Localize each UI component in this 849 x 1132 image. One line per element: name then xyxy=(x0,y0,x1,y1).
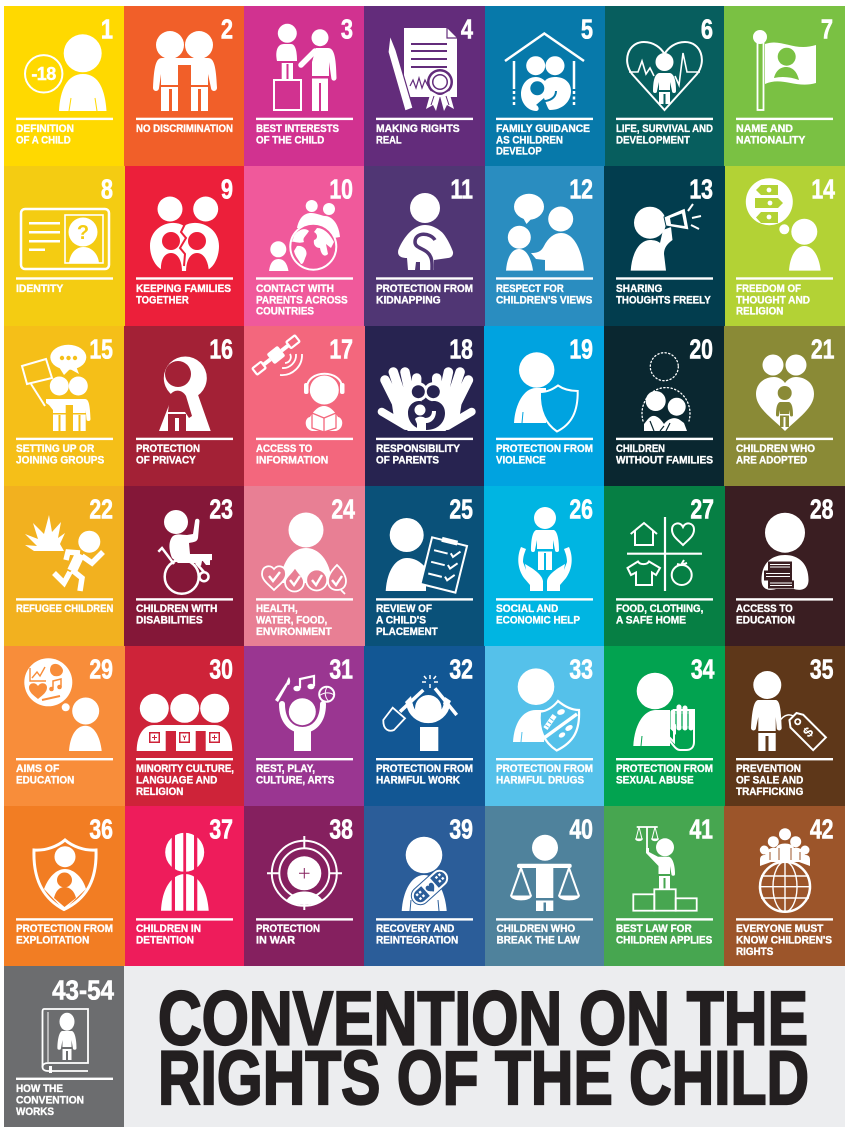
label: BEST INTERESTS xyxy=(256,123,339,135)
icon: child as scales of justice xyxy=(510,835,580,911)
panel: articles 43-54 xyxy=(4,966,124,1127)
icon: document, pen and seal xyxy=(388,28,457,111)
label xyxy=(16,277,113,295)
panel: article 1 xyxy=(4,6,124,166)
label: SEXUAL ABUSE xyxy=(616,774,694,786)
icon: identity card xyxy=(21,209,109,269)
label: REFUGEE CHILDREN xyxy=(16,603,113,615)
label: PROTECTION FROM xyxy=(496,443,593,455)
panel: article 27 xyxy=(604,486,725,646)
label: PROTECTION FROM xyxy=(616,763,713,775)
number 41: 41 xyxy=(689,814,713,845)
number 6: 6 xyxy=(701,14,713,45)
label: KNOW CHILDREN'S xyxy=(736,934,832,946)
panel: article 13 xyxy=(604,166,725,326)
label xyxy=(496,758,593,786)
panel: article 31 xyxy=(244,646,364,806)
label: OF PARENTS xyxy=(376,454,439,466)
label: DEFINITION xyxy=(16,123,74,135)
panel: article 32 xyxy=(364,646,485,806)
label: ECONOMIC HELP xyxy=(496,614,580,626)
label: PROTECTION FROM xyxy=(376,283,473,295)
label xyxy=(16,438,113,466)
number 43-54: 43-54 xyxy=(52,974,114,1006)
number 32: 32 xyxy=(449,654,473,685)
label: VIOLENCE xyxy=(496,454,546,466)
label: WITHOUT FAMILIES xyxy=(616,454,713,466)
number 39: 39 xyxy=(449,814,473,845)
label xyxy=(736,918,833,958)
icon: home, love, clothing, food xyxy=(627,517,702,591)
panel: title background xyxy=(124,966,845,1127)
icon: child on podium holding scales xyxy=(633,827,697,911)
label: CONTACT WITH xyxy=(256,283,334,295)
label xyxy=(376,118,473,146)
label: MAKING RIGHTS xyxy=(376,123,460,135)
label: RESPECT FOR xyxy=(496,283,564,295)
label: EDUCATION xyxy=(16,774,74,786)
label: KEEPING FAMILIES xyxy=(136,283,231,295)
label: LIFE, SURVIVAL AND xyxy=(616,123,713,135)
label: AS CHILDREN xyxy=(496,134,563,146)
panel: article 8 xyxy=(4,166,125,326)
number 15: 15 xyxy=(89,334,113,365)
label xyxy=(376,438,473,466)
icon: child with price tag xyxy=(751,671,826,751)
label: HOW THE xyxy=(16,1083,63,1095)
label xyxy=(616,277,713,306)
panel: article 36 xyxy=(4,806,125,966)
number 13: 13 xyxy=(689,174,713,205)
label xyxy=(136,918,233,946)
label xyxy=(376,598,473,638)
label xyxy=(496,118,593,158)
label: BREAK THE LAW xyxy=(496,934,580,946)
number 5: 5 xyxy=(581,14,593,45)
label: DETENTION xyxy=(136,934,194,946)
panel: article 2 xyxy=(124,6,244,166)
label xyxy=(136,118,233,135)
label xyxy=(256,758,353,786)
label xyxy=(616,918,713,946)
panel: article 42 xyxy=(724,806,845,966)
label: BEST LAW FOR xyxy=(616,923,692,935)
icon: hands holding family xyxy=(382,372,472,431)
label: HARMFUL DRUGS xyxy=(496,774,584,786)
panel: article 33 xyxy=(485,646,605,806)
label: RELIGION xyxy=(736,306,783,318)
label xyxy=(736,277,833,318)
panel: article 5 xyxy=(485,6,605,166)
number 18: 18 xyxy=(449,334,473,365)
number 36: 36 xyxy=(89,814,113,845)
number 8: 8 xyxy=(101,174,113,205)
label: CULTURE, ARTS xyxy=(256,774,334,786)
label: DISABILITIES xyxy=(136,614,203,626)
label xyxy=(376,277,473,306)
icon: children without parents xyxy=(642,353,690,431)
icon: child behind bars xyxy=(161,830,209,912)
label: LANGUAGE AND xyxy=(136,774,217,786)
label: REVIEW OF xyxy=(376,603,432,615)
panel: article 37 xyxy=(125,806,244,966)
label: KIDNAPPING xyxy=(376,294,441,306)
label: OF PRIVACY xyxy=(136,454,196,466)
number 34: 34 xyxy=(691,654,715,685)
panel: article 29 xyxy=(4,646,125,806)
label xyxy=(376,758,473,786)
label: CHILDREN WITH xyxy=(136,603,217,615)
label: NATIONALITY xyxy=(736,134,806,146)
panel: article 18 xyxy=(365,326,485,486)
label: TOGETHER xyxy=(136,294,189,306)
icon: child under 18: -18 xyxy=(31,64,56,84)
label: CHILDREN'S VIEWS xyxy=(496,294,592,306)
icon: children with sign and speech bubble xyxy=(22,345,90,431)
panel: article 20 xyxy=(604,326,724,486)
panel: article 26 xyxy=(484,486,604,646)
number 30: 30 xyxy=(209,654,233,685)
panel: article 6 xyxy=(605,6,724,166)
number 33: 33 xyxy=(569,654,593,685)
number 7: 7 xyxy=(821,14,833,45)
icon: child held by hands xyxy=(518,507,572,591)
panel: article 21 xyxy=(724,326,845,486)
label: CHILDREN WHO xyxy=(496,923,576,935)
label xyxy=(616,598,713,626)
number 16: 16 xyxy=(209,334,233,365)
number 24: 24 xyxy=(331,494,355,525)
label xyxy=(16,918,113,946)
icon: child with books xyxy=(761,513,809,590)
panel: article 30 xyxy=(125,646,244,806)
panel: article 25 xyxy=(365,486,485,646)
label: PROTECTION FROM xyxy=(496,763,593,775)
number 12: 12 xyxy=(569,174,593,205)
icon: book with child xyxy=(42,1009,88,1073)
label: HEALTH, xyxy=(256,603,298,615)
label: REAL xyxy=(376,134,402,146)
label xyxy=(496,277,593,306)
number 23: 23 xyxy=(209,494,233,525)
number 37: 37 xyxy=(209,814,233,845)
label: ENVIRONMENT xyxy=(256,626,332,638)
panel: article 11 xyxy=(364,166,485,326)
label: PLACEMENT xyxy=(376,626,438,638)
number 11: 11 xyxy=(451,174,473,205)
label: PROTECTION FROM xyxy=(376,763,473,775)
label: RIGHTS xyxy=(736,946,773,958)
label xyxy=(736,598,833,626)
icon: family in house xyxy=(505,34,584,111)
panel: article 3 xyxy=(244,6,364,166)
panel: article 38 xyxy=(244,806,364,966)
number 17: 17 xyxy=(329,334,353,365)
label xyxy=(136,277,233,306)
label: AIMS OF xyxy=(16,763,60,775)
label: ACCESS TO xyxy=(736,603,793,615)
label: PROTECTION FROM xyxy=(16,923,113,935)
panel: article 15 xyxy=(4,326,124,486)
label xyxy=(736,118,833,146)
icon: thought of education xyxy=(24,658,102,751)
label: HARMFUL WORK xyxy=(376,774,460,786)
icon: identity card: ? xyxy=(77,222,89,244)
label: WORKS xyxy=(16,1106,54,1118)
label: ARE ADOPTED xyxy=(736,454,807,466)
number 9: 9 xyxy=(221,174,233,205)
label: RESPONSIBILITY xyxy=(376,443,461,455)
panel: article 19 xyxy=(484,326,604,486)
label: WATER, FOOD, xyxy=(256,614,327,626)
panel: article 14 xyxy=(725,166,845,326)
label: IDENTITY xyxy=(16,283,64,295)
number 35: 35 xyxy=(810,654,834,685)
panel: article 24 xyxy=(244,486,365,646)
label xyxy=(16,1078,113,1118)
icon: parents across the globe xyxy=(269,200,340,271)
label: EDUCATION xyxy=(736,614,795,626)
label: ACCESS TO xyxy=(256,443,313,455)
label: DEVELOPMENT xyxy=(616,134,690,146)
number 27: 27 xyxy=(690,494,714,525)
label: FAMILY GUIDANCE xyxy=(496,123,590,135)
icon: child under 18 xyxy=(25,34,106,111)
label: THOUGHT AND xyxy=(736,294,810,306)
label: NAME AND xyxy=(736,123,793,135)
number 26: 26 xyxy=(569,494,593,525)
label xyxy=(16,598,113,615)
number 25: 25 xyxy=(449,494,473,525)
number 28: 28 xyxy=(810,494,834,525)
label: OF A CHILD xyxy=(16,134,71,146)
label: A SAFE HOME xyxy=(616,614,686,626)
icon: thought of signpost xyxy=(746,178,821,271)
label xyxy=(256,118,353,146)
label: PREVENTION xyxy=(736,763,801,775)
label: OF SALE AND xyxy=(736,774,803,786)
label: INFORMATION xyxy=(256,454,328,466)
number 21: 21 xyxy=(811,334,835,365)
icon: heart with heartbeat and child xyxy=(627,42,702,110)
panel: article 17 xyxy=(244,326,365,486)
label: NO DISCRIMINATION xyxy=(136,123,233,135)
label: DEVELOP xyxy=(496,146,542,158)
panel: article 22 xyxy=(4,486,124,646)
label xyxy=(616,118,713,146)
label: CONVENTION xyxy=(16,1095,84,1107)
panel: article 10 xyxy=(244,166,364,326)
panel: article 40 xyxy=(485,806,605,966)
icon: broken family xyxy=(150,196,219,272)
label xyxy=(136,758,234,798)
label xyxy=(16,118,113,146)
panel: article 23 xyxy=(124,486,244,646)
label xyxy=(496,598,593,626)
label xyxy=(136,438,233,466)
label: CHILDREN WHO xyxy=(736,443,815,455)
number 29: 29 xyxy=(89,654,113,685)
panel: article 7 xyxy=(724,6,845,166)
label: PROTECTION xyxy=(136,443,200,455)
label: A CHILD'S xyxy=(376,614,426,626)
panel: article 12 xyxy=(485,166,604,326)
title xyxy=(158,976,809,1121)
label xyxy=(256,277,353,318)
label xyxy=(16,758,113,786)
label xyxy=(256,918,353,946)
number 31: 31 xyxy=(329,654,353,685)
number 3: 3 xyxy=(341,14,353,45)
label: EXPLOITATION xyxy=(16,934,89,946)
icon: child with review checklist xyxy=(386,518,468,593)
icon: child playing, arts and music xyxy=(275,676,334,751)
icon: two children together xyxy=(153,31,217,111)
icon: satellite and reading child xyxy=(251,333,344,432)
icon: shield protecting child xyxy=(34,840,96,910)
label: IN WAR xyxy=(256,934,295,946)
label xyxy=(736,438,833,466)
label: FREEDOM OF xyxy=(736,283,801,295)
label xyxy=(616,758,713,786)
panel: article 39 xyxy=(364,806,485,966)
label: MINORITY CULTURE, xyxy=(136,763,234,775)
icon: child in target xyxy=(267,836,342,910)
icon: child in keyhole xyxy=(159,356,211,431)
icon: flag with person xyxy=(753,30,816,110)
label: CHILDREN APPLIES xyxy=(616,934,712,946)
icon: child with shield xyxy=(514,352,578,432)
label: REST, PLAY, xyxy=(256,763,315,775)
label xyxy=(736,758,833,798)
number 4: 4 xyxy=(461,14,473,45)
label: FOOD, CLOTHING, xyxy=(616,603,703,615)
icon: child with shield against drugs xyxy=(513,668,579,750)
label: EVERYONE MUST xyxy=(736,923,824,935)
number 40: 40 xyxy=(569,814,593,845)
panel: article 34 xyxy=(604,646,725,806)
icon: child in wheelchair xyxy=(158,510,212,594)
panel: article 16 xyxy=(124,326,244,486)
label: CHILDREN IN xyxy=(136,923,201,935)
label: PARENTS ACROSS xyxy=(256,294,348,306)
label xyxy=(616,438,713,466)
label: TRAFFICKING xyxy=(736,786,803,798)
panel: article 4 xyxy=(364,6,485,166)
number 42: 42 xyxy=(810,814,834,845)
label: CHILDREN xyxy=(616,443,665,455)
number 20: 20 xyxy=(689,334,713,365)
icon: protected child xyxy=(398,193,453,271)
label xyxy=(256,438,353,466)
number 22: 22 xyxy=(89,494,113,525)
label: SHARING xyxy=(616,283,662,295)
label: RECOVERY AND xyxy=(376,923,454,935)
icon: child with shovel, harmful work xyxy=(383,675,457,751)
panel: article 41 xyxy=(604,806,724,966)
label xyxy=(256,598,353,638)
number 2: 2 xyxy=(221,14,233,45)
icon: adult with child on box xyxy=(274,24,336,111)
icon: child speaking to adult xyxy=(506,194,584,271)
number 19: 19 xyxy=(569,334,593,365)
icon: running refugee and explosion xyxy=(25,515,103,591)
icon: child with price tag: $ xyxy=(800,723,817,740)
label: COUNTRIES xyxy=(256,306,314,318)
label: RELIGION xyxy=(136,786,183,798)
number 38: 38 xyxy=(329,814,353,845)
label: REINTEGRATION xyxy=(376,934,458,946)
icon: children around the globe xyxy=(760,828,810,912)
icon: three children with flags xyxy=(137,694,232,751)
icon: child with stop hand xyxy=(633,673,694,750)
label: PROTECTION xyxy=(256,923,320,935)
number 10: 10 xyxy=(329,174,353,205)
icon: parents with child in heart xyxy=(756,354,814,431)
number 14: 14 xyxy=(811,174,835,205)
label: SOCIAL AND xyxy=(496,603,558,615)
label xyxy=(496,438,593,466)
icon: child with health, water, food, environment xyxy=(262,512,346,594)
label xyxy=(496,918,593,946)
panel: article 28 xyxy=(725,486,845,646)
panel: article 35 xyxy=(725,646,845,806)
label: OF THE CHILD xyxy=(256,134,324,146)
label: SETTING UP OR xyxy=(16,443,94,455)
icon: child with megaphone xyxy=(631,204,701,271)
number 1: 1 xyxy=(101,14,113,45)
label: THOUGHTS FREELY xyxy=(616,294,711,306)
label: JOINING GROUPS xyxy=(16,454,104,466)
icon: child with bandage xyxy=(402,837,452,911)
panel: article 9 xyxy=(125,166,244,326)
label xyxy=(136,598,233,626)
label xyxy=(376,918,473,946)
